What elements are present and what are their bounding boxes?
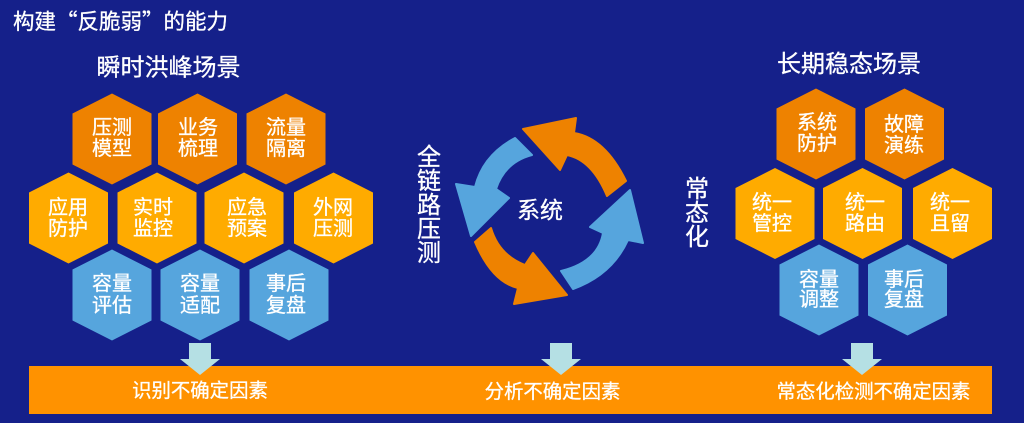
hexagon: 事后复盘 — [250, 250, 328, 340]
hexagon: 故障演练 — [865, 88, 944, 180]
label: full-link load testing: 测 — [417, 233, 441, 268]
hexagon: 流量隔离 — [246, 94, 326, 184]
hexagon: 容量适配: 适配 — [180, 289, 220, 318]
label: system: 系统 — [517, 191, 563, 225]
cycle arrows — [456, 118, 643, 304]
hexagon: 实时监控: 监控 — [133, 212, 173, 241]
bar label: analyze: 分析不确定因素 — [485, 375, 620, 404]
hexagon: 统一路由: 统一 — [845, 186, 885, 215]
hexagon: 实时监控 — [118, 172, 196, 264]
hexagon: 业务梳理: 业务 — [178, 111, 218, 140]
arrow: orange bottom — [475, 228, 567, 304]
hexagon: 系统防护 — [776, 88, 856, 180]
hexagon: 事后复盘 — [868, 244, 947, 336]
panel: instant peak scenario — [29, 48, 373, 340]
hexagon: 压测模型: 模型 — [92, 132, 132, 161]
hexagon: 统一且留 — [913, 168, 992, 259]
label: normalization: 态 — [685, 193, 709, 228]
hexagon: 容量调整 — [780, 244, 858, 336]
hexagon: 流量隔离: 隔离 — [266, 132, 306, 161]
bar label: identify: 识别不确定因素 — [132, 374, 268, 403]
hexagon: 应急预案: 预案 — [227, 212, 267, 241]
hexagon: 事后复盘: 复盘 — [266, 289, 306, 318]
label: normalization: 化 — [685, 217, 709, 252]
hexagon: 流量隔离: 流量 — [266, 111, 306, 140]
arrow: right down — [842, 343, 882, 375]
hexagon: 事后复盘: 事后 — [266, 267, 306, 296]
arrow: blue right — [561, 190, 643, 289]
hexagon: 容量调整: 容量 — [799, 263, 839, 292]
hexagon: 容量调整: 调整 — [799, 283, 839, 312]
bottom bar — [29, 366, 992, 414]
hexagon: 压测模型: 压测 — [92, 111, 132, 140]
hexagon: 实时监控: 实时 — [133, 191, 173, 220]
hexagon: 容量适配 — [160, 250, 240, 340]
arrow: left down — [180, 343, 220, 375]
hexagon: 统一管控 — [736, 168, 814, 259]
hexagon: 容量适配: 容量 — [180, 267, 220, 296]
hexagon: 统一路由 — [823, 168, 902, 259]
label: full-link load testing: 压 — [417, 209, 441, 244]
hexagon: 应急预案: 应急 — [227, 191, 267, 220]
heading: instant peak scenario: 瞬时洪峰场景 — [96, 48, 240, 82]
heading: long-term steady scenario: 长期稳态场景 — [777, 44, 921, 79]
label: normalization: 常 — [685, 169, 709, 204]
hexagon: 应用防护: 应用 — [48, 191, 88, 220]
arrow: orange top — [523, 118, 626, 196]
hexagon: 容量评估: 评估 — [92, 289, 132, 318]
hexagon: 外网压测: 压测 — [313, 212, 353, 241]
hexagon: 容量评估 — [72, 250, 152, 340]
hexagon: 系统防护: 系统 — [797, 106, 837, 135]
hexagon: 外网压测: 外网 — [313, 191, 353, 220]
label: full-link load testing: 路 — [417, 185, 441, 220]
hexagon: 应用防护 — [29, 172, 108, 264]
hexagon: 应用防护: 防护 — [48, 212, 88, 241]
hexagon: 业务梳理: 梳理 — [178, 132, 218, 161]
hexagon: 系统防护: 防护 — [797, 127, 837, 156]
hexagon: 事后复盘: 事后 — [884, 263, 924, 292]
hexagon: 外网压测 — [294, 172, 373, 264]
hexagon: 容量评估: 容量 — [92, 267, 132, 296]
bar label: normalized detection: 常态化检测不确定因素 — [777, 375, 970, 404]
hexagon: 故障演练: 演练 — [884, 129, 924, 158]
hexagon: 统一管控: 统一 — [752, 186, 792, 215]
arrow: middle down — [541, 343, 581, 375]
hexagon: 统一且留: 且留 — [930, 207, 970, 236]
arrow: blue left — [456, 138, 532, 236]
label: full-link load testing: 链 — [417, 161, 441, 196]
title: 构建“反脆弱”的能力 — [13, 5, 228, 36]
hexagon: 统一管控: 管控 — [752, 207, 792, 236]
hexagon: 业务梳理 — [158, 94, 237, 184]
hexagon: 压测模型 — [72, 94, 152, 184]
panel: system cycle — [417, 118, 709, 304]
hexagon: 统一路由: 路由 — [845, 207, 885, 236]
label: full-link load testing: 全 — [417, 137, 441, 172]
panel: long-term steady scenario — [736, 44, 992, 336]
hexagon: 应急预案 — [204, 172, 284, 264]
hexagon: 故障演练: 故障 — [884, 108, 924, 137]
hexagon: 统一且留: 统一 — [930, 186, 970, 215]
hexagon: 事后复盘: 复盘 — [884, 283, 924, 312]
